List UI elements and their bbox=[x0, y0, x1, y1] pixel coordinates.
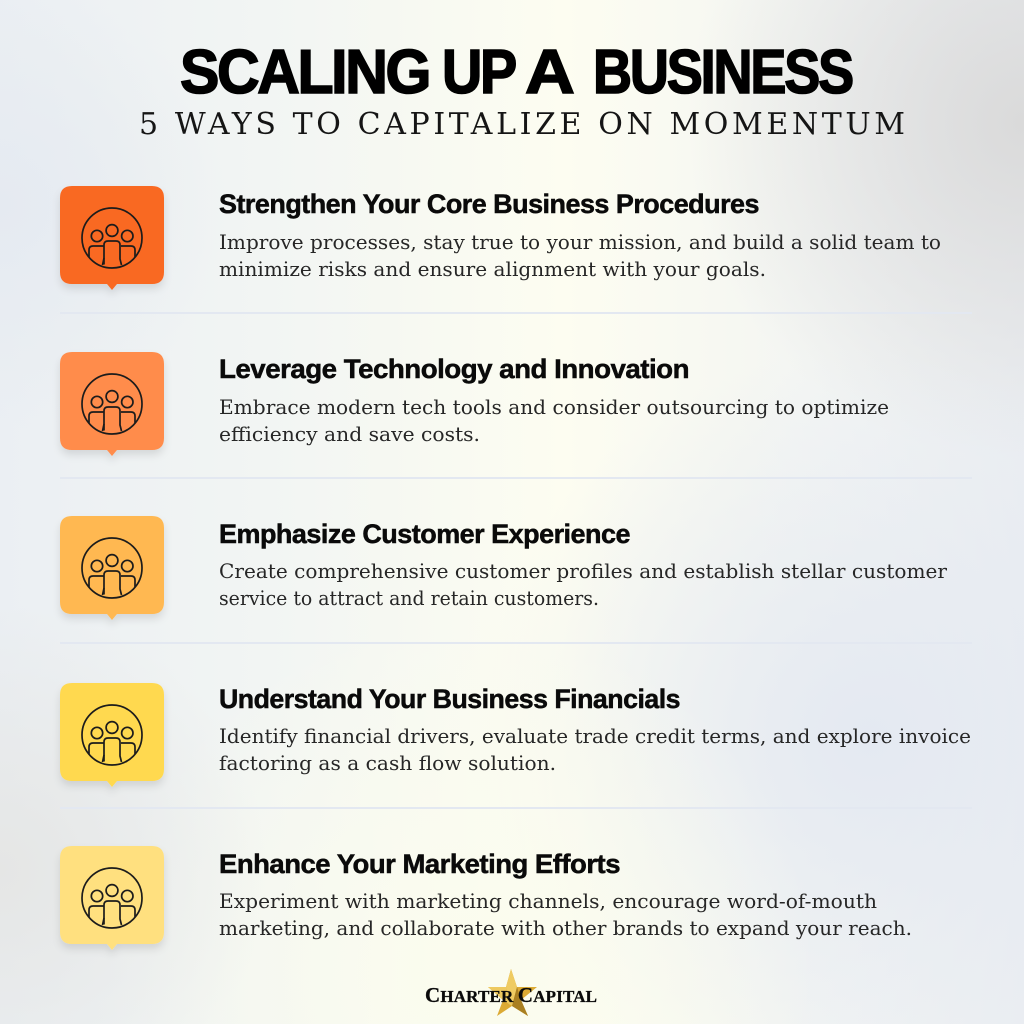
description bbox=[219, 560, 948, 610]
description: minimize risks and ensure alignment with your goals. bbox=[219, 258, 766, 281]
logo: Charter Capital bbox=[425, 969, 597, 1016]
panel: step 3 bbox=[60, 516, 948, 620]
heading: Strengthen Your Core Business Procedures bbox=[219, 189, 759, 219]
description: efficiency and save costs. bbox=[219, 423, 480, 446]
subtitle: 5 WAYS TO CAPITALIZE ON MOMENTUM bbox=[139, 107, 905, 142]
heading: Leverage Technology and Innovation bbox=[219, 354, 689, 384]
icon: team badge pale yellow bbox=[60, 846, 164, 950]
title bbox=[180, 38, 852, 107]
heading: Understand Your Business Financials bbox=[219, 684, 680, 714]
title: A bbox=[525, 38, 574, 107]
description: factoring as a cash flow solution. bbox=[219, 752, 556, 775]
description: Create comprehensive customer profiles and establish stellar customer bbox=[219, 560, 948, 583]
panel: step 2 bbox=[60, 352, 889, 456]
description: Embrace modern tech tools and consider outsourcing to optimize bbox=[219, 396, 889, 419]
icon: team badge orange bbox=[60, 186, 164, 290]
icon: gold star bbox=[488, 969, 537, 1016]
description: service to attract and retain customers. bbox=[219, 587, 599, 610]
heading: Enhance Your Marketing Efforts bbox=[219, 849, 620, 879]
description: marketing, and collaborate with other brands to expand your reach. bbox=[219, 917, 912, 940]
title: UP bbox=[442, 38, 516, 107]
description bbox=[219, 890, 912, 940]
wordmark: CHARTER CAPITAL bbox=[425, 983, 597, 1007]
icon: team badge yellow bbox=[60, 683, 164, 787]
icon: team badge light orange bbox=[60, 352, 164, 456]
icon: team badge amber bbox=[60, 516, 164, 620]
panel: step 5 bbox=[60, 846, 912, 950]
description: Experiment with marketing channels, encourage word-of-mouth bbox=[219, 890, 877, 913]
panel: step 1 bbox=[60, 186, 941, 290]
description bbox=[219, 231, 941, 281]
description: Identify financial drivers, evaluate trade credit terms, and explore invoice bbox=[219, 725, 971, 748]
title: BUSINESS bbox=[593, 38, 852, 107]
heading: Emphasize Customer Experience bbox=[219, 519, 630, 549]
description bbox=[219, 396, 889, 446]
description bbox=[219, 725, 971, 775]
description: Improve processes, stay true to your mission, and build a solid team to bbox=[219, 231, 941, 254]
title: SCALING bbox=[180, 38, 429, 107]
panel: step 4 bbox=[60, 683, 971, 787]
